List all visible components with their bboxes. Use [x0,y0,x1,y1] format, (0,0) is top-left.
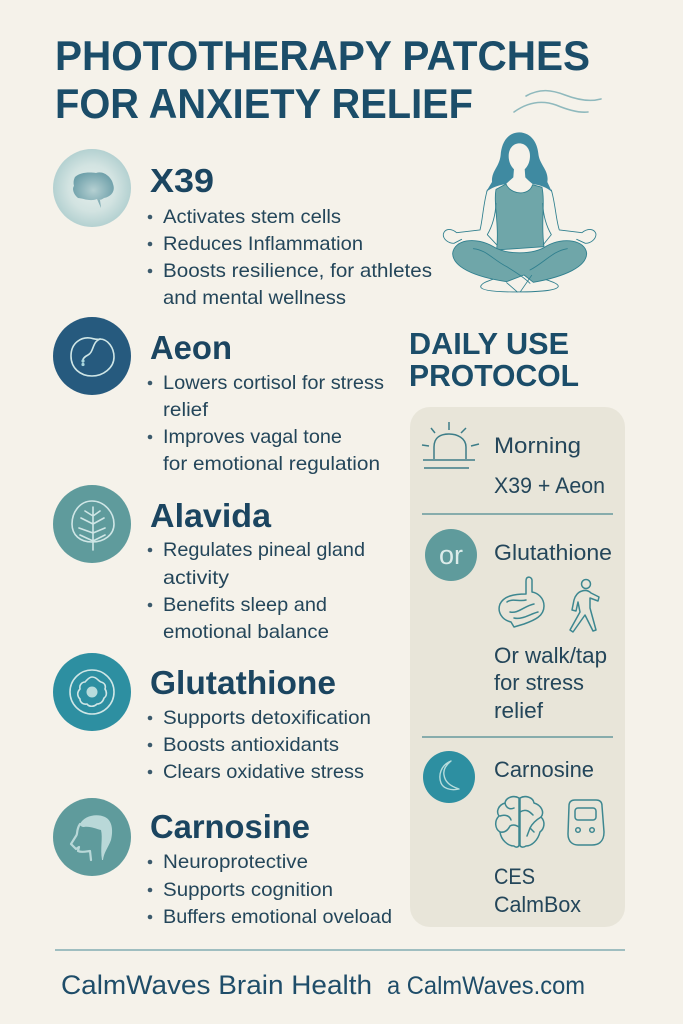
title: PHOTOTHERAPY PATCHES [55,32,590,79]
bullet list: Supports cognition [163,879,333,901]
bullet list: Boosts resilience, for athletes [163,260,432,282]
heading: X39 [150,162,214,199]
icon: nerve line [53,317,131,395]
text: morning [494,433,605,498]
bullet list: relief [163,399,209,421]
text: carnosine: Carnosine [494,757,594,782]
icon: moon [423,751,475,803]
bullet list: Reduces Inflammation [163,233,363,255]
heading: Alavida [150,497,272,534]
heading: Glutathione [150,664,336,701]
panel: daily protocol [410,407,625,927]
text: CES CalmBox: CalmBox [494,892,582,917]
icon: brain cloud [53,149,131,227]
text: morning: Morning [494,433,581,458]
bullet list: Neuroprotective [163,851,308,873]
bullet list [148,206,432,309]
bullet list: Boosts antioxidants [163,734,339,756]
badge: or [425,529,477,581]
text: walk or tap [494,643,607,723]
bullet list: Supports detoxification [163,707,371,729]
footer [61,970,585,1000]
icon: CES device [568,800,604,845]
icon: gut [499,577,544,627]
heading: daily use protocol: DAILY USE [409,327,569,361]
heading: Carnosine [150,808,310,845]
bullet list: for emotional regulation [163,453,380,475]
text: walk or tap: Or walk/tap [494,643,607,668]
bullet list [148,707,371,783]
bullet list: Buffers emotional oveload [163,906,392,928]
bullet list: Lowers cortisol for stress [163,372,384,394]
text: CES CalmBox [494,864,582,917]
icon: sunrise [422,422,479,468]
icon: head profile [53,798,131,876]
icon: cell [53,653,131,731]
bullet list [148,851,392,928]
text: walk or tap: relief [494,698,544,723]
footer: a CalmWaves.com [387,972,585,1000]
text: walk or tap: for stress [494,670,584,695]
bullet list: Benefits sleep and [163,594,327,616]
panel: Alavida [53,485,365,643]
panel: Glutathione [53,653,371,783]
bullet list: Regulates pineal gland [163,539,365,561]
panel: Carnosine [53,798,392,928]
icon: leaf [53,485,131,563]
bullet list [148,539,365,643]
bullet list: Activates stem cells [163,206,341,228]
text: glutathione: Glutathione [494,540,612,565]
panel: X39 [53,149,432,309]
footer: CalmWaves Brain Health [61,970,372,1000]
bullet list: and mental wellness [163,287,346,309]
badge: or: or [439,540,463,570]
heading: daily use protocol: PROTOCOL [409,359,579,393]
bullet list: emotional balance [163,621,329,643]
icon: calm waves [514,91,601,112]
heading: daily use protocol [409,327,579,393]
text: CES CalmBox: CES [494,864,535,889]
icon: brain [496,797,544,847]
panel: Aeon [53,317,384,475]
icon: walking person [570,580,599,632]
bullet list: Clears oxidative stress [163,761,364,783]
illustration: meditating woman [443,132,596,292]
title: FOR ANXIETY RELIEF [55,80,473,127]
heading: Aeon [150,329,232,366]
bullet list: Improves vagal tone [163,426,342,448]
title [55,32,590,127]
bullet list: activity [163,567,229,589]
bullet list [148,372,384,475]
text: morning: X39 + Aeon [494,473,605,498]
